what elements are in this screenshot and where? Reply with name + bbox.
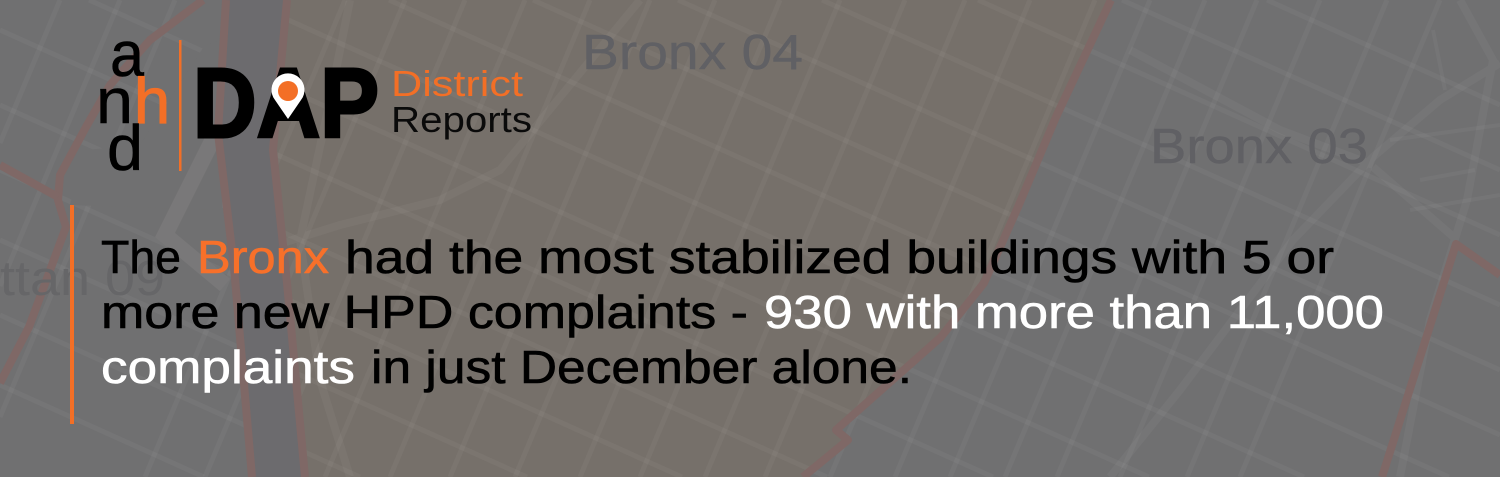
headline statement: complaints [101,341,355,393]
headline statement: had the most stabilized buildings with 5 or [345,231,1334,283]
logo letters: a n h d: a [110,18,144,90]
headline statement [101,231,1384,393]
orange accent bar [70,205,74,424]
logo text: District: District [391,63,523,104]
headline statement: in just December alone. [371,341,912,393]
logo letters: a n h d: d [107,112,143,184]
map region: Bronx 04 highlighted district [273,0,1111,477]
logo letters: a n h d: n [96,65,133,137]
icon: map pin [272,73,305,119]
logo divider [179,40,182,171]
logo letters: a n h d [96,18,170,184]
map: wide light road west of river [165,135,225,285]
logo wordmark: DAP: DAP [193,48,379,158]
map label: Manhattan 09 fragment: ttan 09 [0,252,165,306]
headline statement: Bronx [197,231,329,283]
map label: Bronx 03: Bronx 03 [1150,120,1368,174]
logo: and h DAP District Reports [96,18,532,184]
map label: Bronx 04: Bronx 04 [582,26,803,80]
map: sparse area near river [70,40,222,210]
map: river band [218,0,306,477]
headline statement: more new HPD complaints - [101,286,748,338]
headline statement: The [101,231,181,283]
logo text: Reports: Reports [391,99,532,140]
logo letters: a n h d: h [134,65,170,137]
headline statement: 930 with more than 11,000 [764,286,1384,338]
